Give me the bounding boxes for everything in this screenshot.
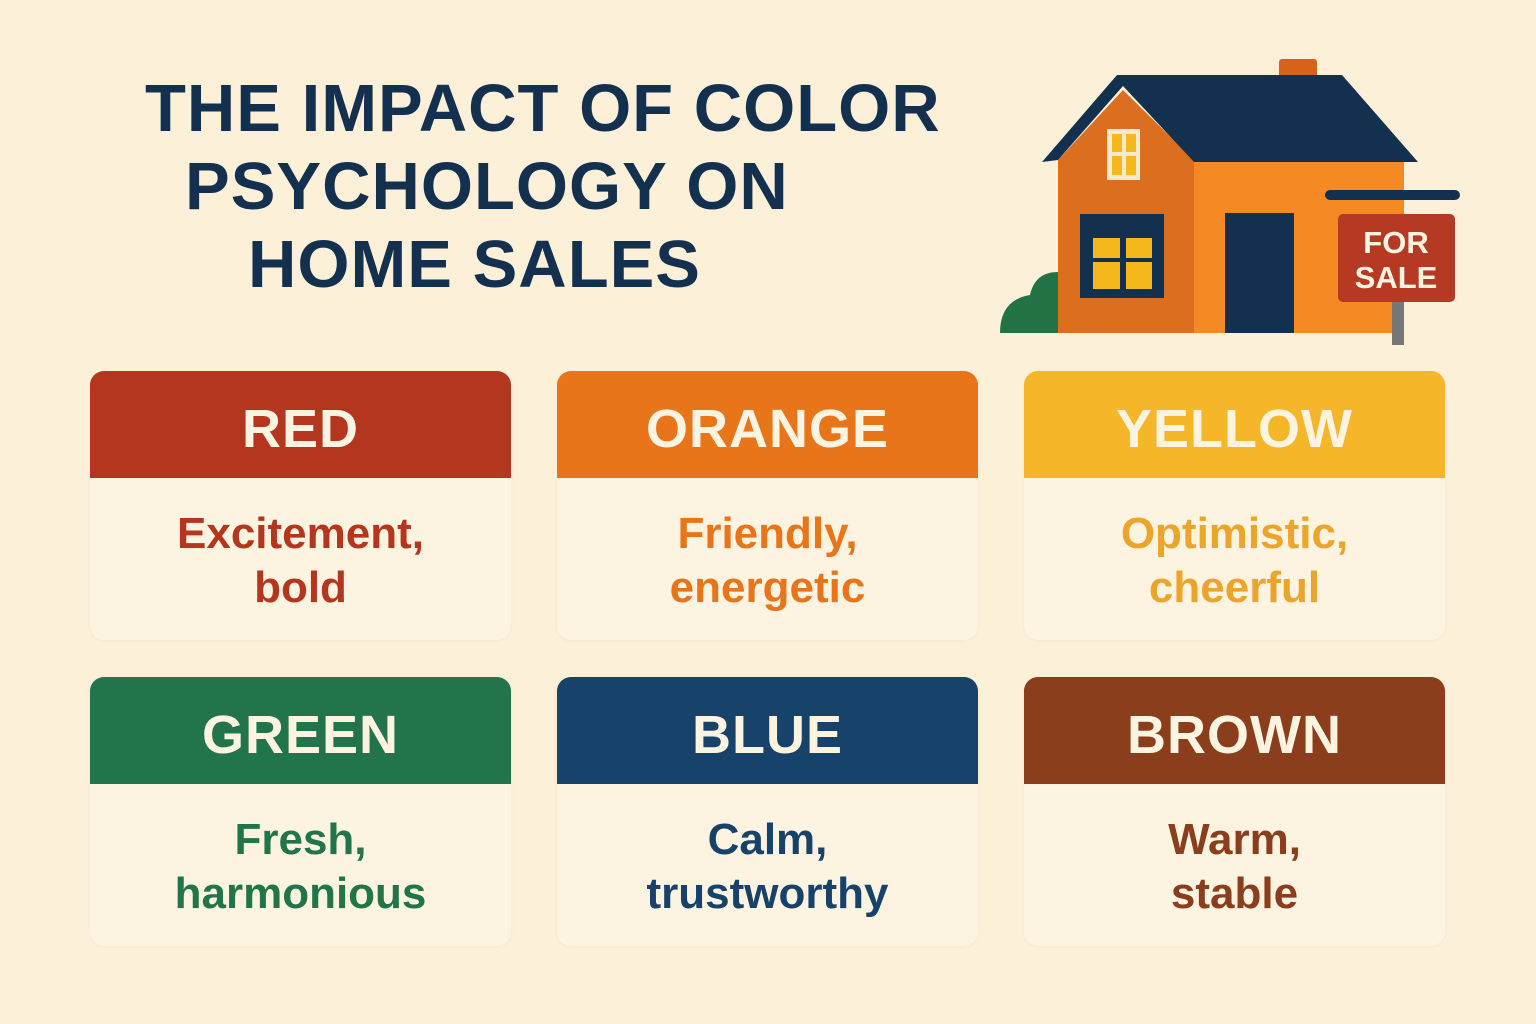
card: green: Fresh,: [234, 815, 367, 864]
card: blue: trustworthy: [646, 869, 888, 918]
title: THE IMPACT OF COLOR: [145, 71, 941, 146]
card: green: [90, 677, 511, 946]
card: yellow: [1024, 371, 1445, 640]
card: blue: BLUE: [692, 705, 843, 765]
card: orange: ORANGE: [646, 399, 889, 459]
card: blue: Calm,: [708, 815, 827, 864]
card: brown: BROWN: [1127, 705, 1342, 765]
title: HOME SALES: [248, 227, 701, 302]
card: brown: stable: [1171, 869, 1298, 918]
card: red: Excitement,: [177, 509, 424, 558]
title: PSYCHOLOGY ON: [185, 149, 789, 224]
card: green: GREEN: [202, 705, 399, 765]
card: red: [90, 371, 511, 640]
card: orange: Friendly,: [677, 509, 858, 558]
card: blue: [557, 677, 978, 946]
card: yellow: YELLOW: [1116, 399, 1353, 459]
icon: house with for sale sign: [1000, 59, 1460, 345]
card: yellow: cheerful: [1149, 563, 1320, 612]
card: red: RED: [242, 399, 359, 459]
card: green: harmonious: [175, 869, 426, 918]
card: yellow: Optimistic,: [1121, 509, 1348, 558]
card: brown: [1024, 677, 1445, 946]
card: red: bold: [254, 563, 347, 612]
card: orange: energetic: [670, 563, 865, 612]
icon: house with for sale sign: FOR: [1363, 225, 1429, 260]
card: brown: Warm,: [1168, 815, 1301, 864]
card: orange: [557, 371, 978, 640]
icon: house with for sale sign: SALE: [1355, 260, 1437, 295]
title: [145, 71, 941, 302]
